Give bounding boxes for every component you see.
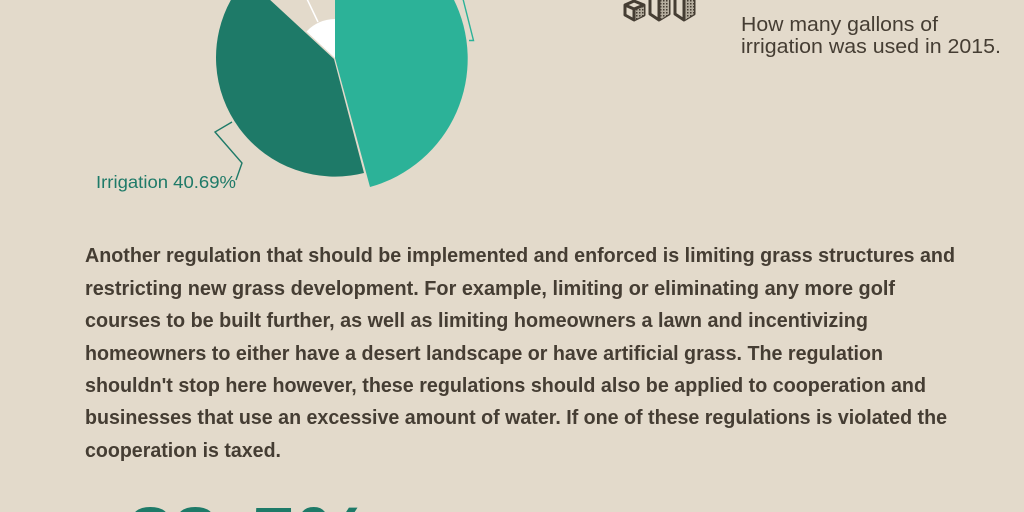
tall container one <box>650 0 669 20</box>
caption: irrigation gallons <box>741 14 1001 58</box>
irrigation leader line <box>215 122 242 180</box>
body paragraph: regulations: shouldn't stop here however, these regulations should also be applied to cooperation and <box>85 375 926 397</box>
body paragraph: regulations: restricting new grass development. For example, limiting or eliminating any more golf <box>85 278 895 300</box>
tall container two <box>675 0 694 20</box>
white slice <box>306 19 335 58</box>
dark green irrigation slice <box>216 0 364 177</box>
white leader line <box>307 0 318 22</box>
body paragraph: regulations: cooperation is taxed. <box>85 440 281 462</box>
body paragraph: regulations: courses to be built further, as well as limiting homeowners a lawn and incentivizing <box>85 310 868 332</box>
teal leader line <box>463 0 474 40</box>
body paragraph: regulations <box>85 245 955 462</box>
pie chart: water use <box>215 0 474 187</box>
light teal slice <box>335 0 468 187</box>
body paragraph: regulations: Another regulation that should be implemented and enforced is limiting grass structures and <box>85 245 955 267</box>
body paragraph: regulations: homeowners to either have a desert landscape or have artificial grass. The regulation <box>85 343 883 365</box>
body paragraph: regulations: businesses that use an excessive amount of water. If one of these regulations is violated the <box>85 407 947 429</box>
cube container <box>625 1 644 20</box>
label: irrigation percentage: Irrigation 40.69% <box>96 172 236 192</box>
caption: irrigation gallons: irrigation was used in 2015. <box>741 36 1001 58</box>
caption: irrigation gallons: How many gallons of <box>741 14 938 36</box>
icon: three gallon containers <box>625 0 694 20</box>
